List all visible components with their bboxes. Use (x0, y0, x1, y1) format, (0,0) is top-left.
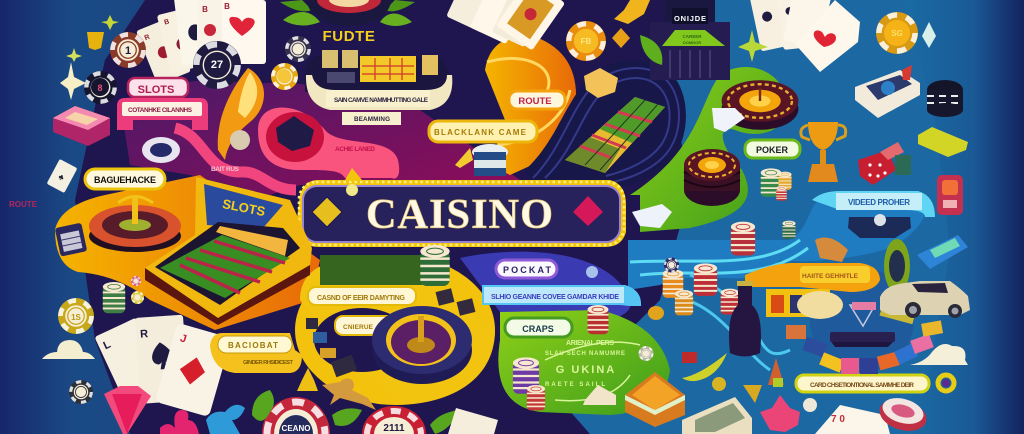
label: CASND OF EEIR DAMYTING: CASND OF EEIR DAMYTING (317, 295, 406, 302)
icon: leaves (252, 390, 460, 434)
playing cards top left: B (202, 5, 208, 14)
icon: card bottom (448, 408, 498, 434)
playing cards top left (136, 0, 266, 85)
chip stack purple (513, 357, 539, 394)
icon: black chip stack (927, 80, 963, 117)
slots machine (145, 177, 312, 325)
chip: grey bottom left (69, 380, 93, 404)
panel: purple and blue swirl (460, 252, 631, 318)
icon: money stack (682, 397, 752, 434)
pink swirl ribbon (175, 128, 296, 190)
icon: orange leaf chips (815, 238, 848, 262)
chip: gold SG: SG (891, 29, 903, 38)
roulette wheel upper (722, 80, 798, 130)
playing cards bottom left: L (102, 338, 113, 352)
banner: blue (482, 285, 641, 306)
icon: small card: ♣ (57, 172, 66, 183)
label: POKER: POKER (756, 145, 788, 155)
banner: blue: SLHIO GEANNE COVEE GAMDAR KHIDE (491, 294, 619, 301)
panel: yellow swirl top centre (485, 35, 576, 175)
playing cards bottom left (94, 315, 231, 417)
icon: gold cube (584, 68, 618, 98)
icon: leaf (640, 35, 662, 65)
playing cards top left: B (224, 2, 230, 11)
chip: 27 (193, 41, 241, 89)
panel: cyan swirl (628, 195, 928, 370)
icon: pink squiggle (160, 410, 199, 434)
icon: open box (855, 65, 920, 118)
chip: 2111 (362, 406, 426, 434)
icon: car dash top (848, 214, 911, 238)
icon: tiny pieces (712, 358, 784, 403)
icon: top roulette with leaves (280, 0, 415, 26)
icon: pink cash stack (53, 106, 110, 146)
label: ROUTE (509, 91, 565, 109)
icon: blue squiggle (206, 405, 245, 434)
icon: star (297, 368, 318, 391)
heading: CAISINO (366, 192, 554, 238)
icon: red dice (858, 142, 911, 185)
icon: popcorn (230, 130, 250, 150)
playing cards top left: B (164, 19, 170, 27)
icon: red token (682, 352, 697, 363)
label: POKER (745, 140, 800, 158)
label: BLACKLANK CAME (429, 121, 537, 142)
icon: building: CAREER (682, 34, 702, 39)
playing cards top left: R (144, 34, 151, 42)
playing cards bottom left: R (140, 328, 149, 341)
label: BEAMMING (342, 112, 401, 125)
chip stack red upper (731, 221, 796, 255)
chip: 1 (110, 32, 146, 68)
chip: dark left (84, 71, 117, 104)
banner: pink (117, 98, 208, 130)
icon: small slot card (55, 223, 87, 257)
label: CASND OF EEIR DAMYTING (308, 287, 416, 305)
banner: yellow bottom right (796, 375, 929, 392)
label: ACHIE LANED: ACHIE LANED (335, 146, 375, 153)
table text: RAETE SAILL (545, 382, 605, 388)
chip: grey (285, 36, 311, 62)
label: BAGUEHACKE: BAGUEHACKE (94, 175, 156, 185)
chip: yellow 1S: 1S (71, 313, 82, 322)
label: CRAPS: CRAPS (522, 324, 554, 334)
chip: 2111: 2111 (383, 423, 405, 434)
chip: green standing (884, 239, 910, 293)
label: ROUTE: ROUTE (518, 96, 552, 107)
chip stack red (527, 385, 545, 410)
chip: gold FB: FB (581, 37, 592, 46)
chip: gold FB (566, 21, 606, 61)
icon: trophy (801, 122, 846, 182)
heading: FUDTE: FUDTE (322, 28, 376, 45)
table text: G UKINA (556, 364, 616, 376)
icon: building: DOMNOR (683, 40, 701, 45)
label: BLACKLANK CAME: BLACKLANK CAME (434, 128, 527, 137)
icon: yellow star (87, 32, 104, 50)
label: SLOTS: SLOTS (221, 196, 267, 219)
icon: pink star (760, 395, 800, 432)
cards top right (749, 0, 860, 72)
chip: gold SG (876, 12, 918, 54)
icon: white cards right of marquee (632, 204, 672, 228)
icon: pink chip tile (937, 175, 963, 215)
roulette wheel lower (684, 149, 740, 206)
banner: BACIOBAT: GINDER RHSIDICEST (243, 360, 293, 366)
chip: 27: 27 (211, 59, 223, 71)
chip: small gold (271, 63, 298, 90)
icon: orange gem box (625, 372, 685, 427)
banner: VIDEED PROHER: VIDEED PROHER (848, 198, 910, 207)
panel: navy roulette track (525, 60, 686, 195)
icon: blue card (917, 235, 968, 269)
roulette on ring (372, 306, 472, 384)
panel: yellow roulette ring (295, 255, 495, 405)
marquee: CASINO (296, 168, 626, 247)
icon: card bottom right: 7 0 (831, 414, 845, 425)
panel: green craps table (498, 310, 670, 415)
icon: cloud left (42, 340, 95, 359)
banner: yellow bottom right: CARD CHSETIONTIONAL SAMMHE DEIR (810, 382, 914, 389)
table arc with card tiles (786, 268, 943, 374)
chip: CEANO (262, 397, 330, 434)
panel: right blue field (560, 0, 950, 434)
icon: small ball (803, 398, 817, 412)
banner: VIDEED PROHER (812, 191, 935, 217)
chip: CEANO: CEANO (282, 424, 310, 433)
heart (229, 17, 255, 36)
label: CNIERUE (335, 316, 395, 335)
icon: sparkles (60, 15, 119, 100)
icon: white cards near wheel (712, 108, 745, 132)
panel: green swirl (630, 67, 798, 232)
icon: gold diamond (612, 28, 630, 48)
label: CRAPS (505, 318, 572, 337)
label: BAGUEHACKE (85, 169, 165, 189)
icon: banana (682, 353, 727, 381)
chip: red bottom right (876, 394, 930, 434)
icon: car (880, 281, 970, 318)
icon: yellow ring (938, 375, 954, 391)
icon: small card (47, 159, 77, 193)
icon: yellow tile (918, 127, 968, 157)
label: faint ROUTE: ROUTE (9, 200, 38, 209)
pink loop with table (258, 108, 399, 179)
banner: cream arch: SAIN CAMVE NAMMHUTTING GALE (334, 97, 429, 104)
banner: orange: HAIITE GEHHITLE (802, 273, 859, 280)
chip: green top of ring (420, 245, 450, 286)
icon: chest (766, 289, 843, 319)
icon: dog (322, 378, 376, 410)
yellow hair swirl (218, 68, 264, 160)
icon: chip stacks centre (455, 144, 508, 176)
label: CNIERUE: CNIERUE (343, 324, 374, 331)
icon: tiles on ring (306, 288, 475, 377)
playing cards bottom left: J (179, 332, 188, 346)
cards top centre (446, 0, 565, 52)
icon: blue ball (586, 266, 598, 278)
icon: left roulette (89, 196, 181, 252)
banner: BACIOBAT (210, 333, 302, 373)
label: SLOTS (128, 78, 188, 97)
label: BEAMMING: BEAMMING (354, 116, 390, 123)
icon: sparkle green (738, 30, 768, 62)
banner: pink: COTANHKE CILANNHS (128, 107, 193, 114)
icon: triangle chip (583, 385, 616, 405)
label: SLOTS: SLOTS (138, 84, 174, 96)
icon: gold diamond tile (312, 197, 342, 227)
panel: orange region (55, 175, 320, 330)
label: POCKAT: POCKAT (503, 265, 552, 275)
icon: gem pink (104, 386, 151, 434)
chip: small ring (648, 306, 664, 320)
icon: star bulb (346, 184, 358, 196)
chip stacks craps (588, 305, 654, 361)
table text (545, 340, 625, 388)
table text: SLAU SECH NAMUMRE (545, 351, 625, 357)
banner: cream arch (306, 75, 452, 110)
icon: green chip stack (761, 168, 792, 201)
icon: red diamond tile (573, 196, 603, 226)
chip: yellow 1S (58, 298, 94, 334)
banner: BACIOBAT: BACIOBAT (228, 341, 278, 350)
chip: dark left: 8 (97, 83, 103, 93)
label: POCKAT (496, 260, 557, 278)
icon: building (650, 0, 730, 80)
panel: magenta slots region (120, 68, 520, 195)
icon: cloud right (910, 344, 968, 365)
chip: swirl (142, 137, 180, 163)
label: BAIT RUS: BAIT RUS (211, 166, 240, 173)
banner: orange (745, 263, 880, 292)
icon: card bottom right (815, 405, 890, 434)
slot machine row (305, 50, 452, 92)
chip stack left (103, 276, 144, 313)
icon: building: ONIJDE (674, 14, 706, 23)
chip stacks blue swirl (663, 258, 739, 315)
icon: gold star (614, 0, 650, 24)
icon: bottle (729, 281, 761, 356)
heart (814, 30, 836, 47)
chip: 1: 1 (125, 45, 131, 57)
table text: ARIENAL PERS (566, 340, 614, 347)
icon: white diamond (922, 22, 936, 48)
